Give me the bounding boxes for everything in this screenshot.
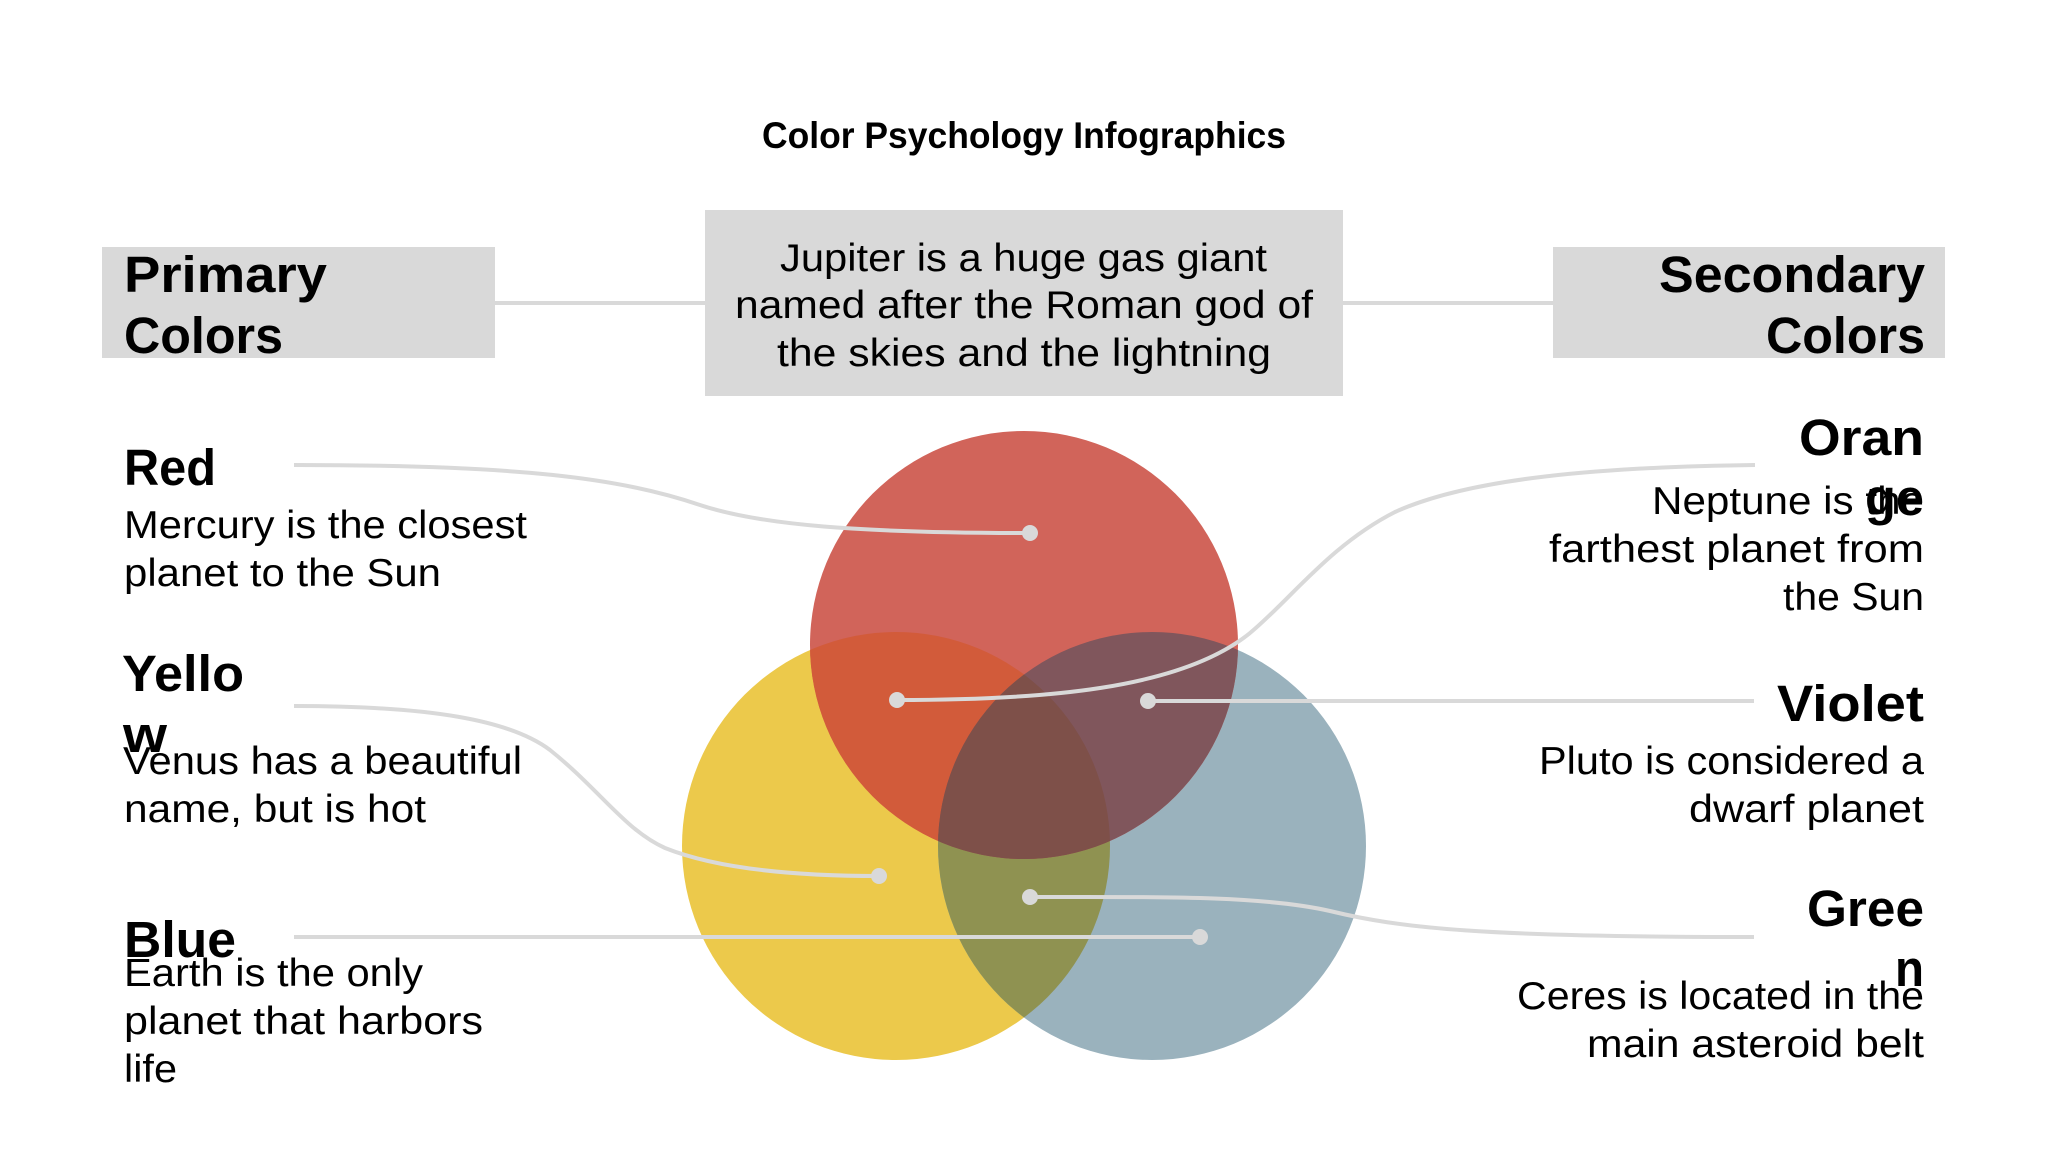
panel: primary colors heading [102, 246, 495, 364]
text block: red [124, 439, 527, 595]
circle: yellow [682, 632, 1110, 1060]
connector: center box to secondary box [1343, 301, 1553, 305]
connector: orange [889, 465, 1755, 708]
panel: secondary colors heading: Colors [1766, 307, 1925, 364]
text block: green: n [1895, 940, 1924, 997]
circle: blue [938, 632, 1366, 1060]
text block: blue: planet that harbors [124, 1000, 483, 1043]
overlap: yellow and blue (green) [938, 841, 1110, 1018]
text block: orange: the Sun [1783, 576, 1924, 619]
text block: orange [1549, 409, 1924, 619]
title: Color Psychology Infographics [762, 115, 1286, 156]
text block: green: Ceres is located in the [1517, 975, 1924, 1018]
text block: orange: ge [1865, 469, 1924, 526]
text block: blue [124, 911, 483, 1091]
panel: secondary colors heading [1553, 246, 1945, 364]
overlap: red and yellow (orange) [810, 632, 1110, 859]
text block: yellow: name, but is hot [124, 788, 426, 831]
text block: yellow: w [122, 706, 167, 763]
text block: green: Gree [1807, 880, 1924, 937]
text block: violet: Pluto is considered a [1539, 740, 1924, 783]
panel: primary colors heading: Colors [124, 307, 283, 364]
text block: orange: Neptune is the [1652, 480, 1924, 523]
panel: center description [705, 210, 1343, 396]
panel: center description: Jupiter is a huge gas giant [780, 237, 1267, 280]
text block: green: main asteroid belt [1587, 1023, 1924, 1066]
text block: violet [1539, 675, 1924, 831]
text block: yellow [122, 645, 522, 831]
connector: green [1022, 889, 1754, 937]
text block: violet: Violet [1777, 675, 1924, 732]
text block: red: Red [124, 439, 216, 496]
panel: center description: named after the Roman god of [735, 284, 1313, 327]
venn diagram [682, 431, 1366, 1060]
text block: orange: farthest planet from [1549, 528, 1924, 571]
connector: yellow [294, 706, 887, 884]
text block: orange: Oran [1799, 409, 1924, 466]
text block: blue: Earth is the only [124, 952, 424, 995]
panel: secondary colors heading: Secondary [1659, 246, 1926, 303]
text block: red: planet to the Sun [124, 552, 441, 595]
panel: center description: the skies and the lightning [777, 332, 1271, 375]
text block: red: Mercury is the closest [124, 504, 527, 547]
text block: yellow: Yello [122, 645, 244, 702]
connector: red [294, 465, 1038, 541]
panel: primary colors heading: Primary [124, 246, 328, 303]
overlap: red and blue (violet) [938, 632, 1238, 859]
text block: yellow: Venus has a beautiful [123, 740, 522, 783]
connector: primary box to center box [495, 301, 705, 305]
text block: green [1517, 880, 1924, 1066]
connector: violet [1140, 693, 1754, 709]
connector: blue [294, 929, 1208, 945]
overlap: all three [938, 674, 1110, 859]
text block: blue: Blue [124, 911, 236, 968]
circle: red [810, 431, 1238, 859]
text block: blue: life [124, 1048, 177, 1091]
text block: violet: dwarf planet [1689, 788, 1924, 831]
